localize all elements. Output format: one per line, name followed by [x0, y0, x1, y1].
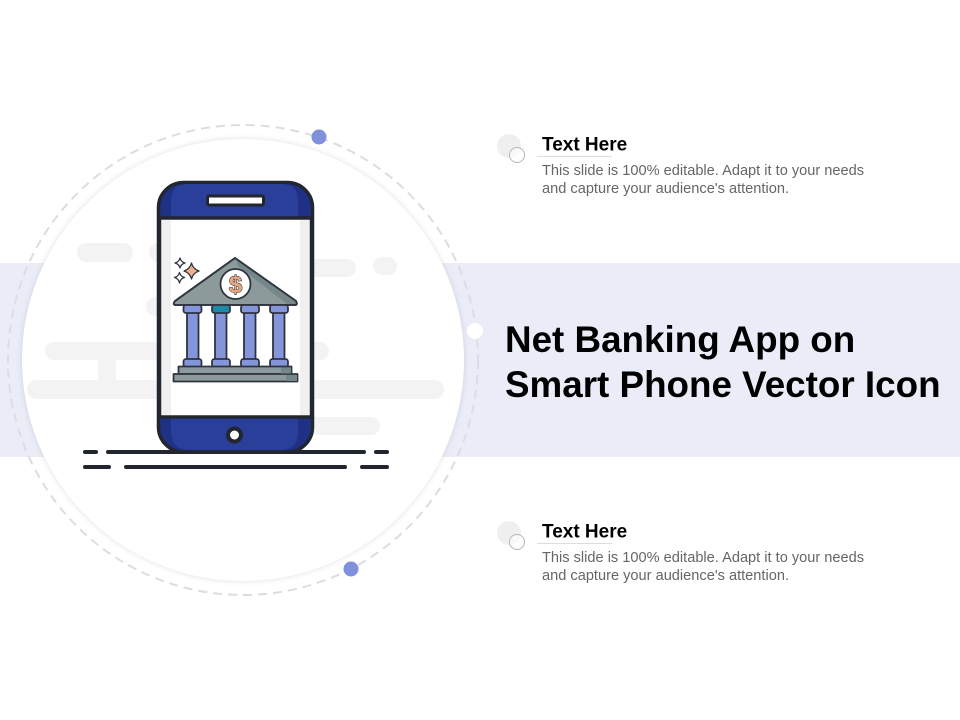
title: Smart Phone Vector Icon — [505, 364, 941, 405]
text block: bottom — [497, 521, 868, 584]
top heading: Text Here — [542, 134, 627, 156]
background band — [0, 263, 960, 457]
top body text: and capture your audience's attention. — [542, 181, 789, 197]
icon: bank building — [174, 258, 298, 382]
dashed orbit ring — [8, 125, 478, 595]
top body text: This slide is 100% editable. Adapt it to your needs — [542, 163, 864, 179]
white circle panel — [22, 139, 464, 581]
dollar badge: $ — [229, 272, 243, 298]
sparkle stars — [174, 258, 199, 283]
bottom heading: Text Here — [542, 522, 627, 542]
top bullet icon — [497, 134, 524, 162]
text block: top — [497, 134, 868, 197]
orbit dots — [312, 130, 483, 576]
bottom body text: This slide is 100% editable. Adapt it to your needs — [542, 550, 864, 566]
title: Net Banking App on — [505, 319, 855, 360]
bottom bullet icon — [497, 521, 524, 550]
bank columns — [184, 305, 288, 367]
ground lines — [85, 452, 387, 467]
bottom body text: and capture your audience's attention. — [542, 568, 789, 584]
bank steps — [174, 366, 298, 382]
bank roof — [174, 258, 297, 305]
background cloud shapes — [27, 243, 444, 435]
icon: smartphone — [158, 182, 312, 452]
